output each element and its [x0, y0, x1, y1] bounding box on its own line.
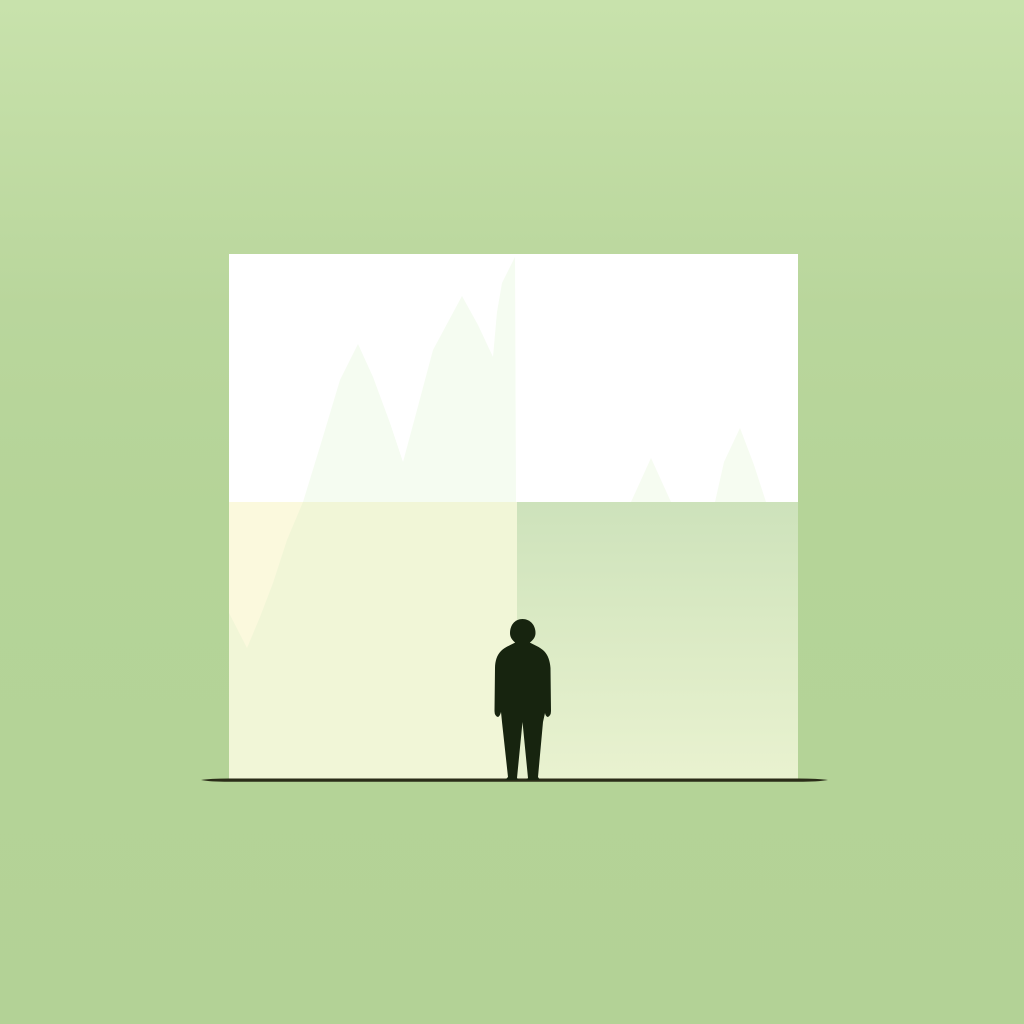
chart: tall peak in top right quadrant — [715, 428, 766, 502]
panel: bottom left pale yellow quadrant — [229, 502, 517, 779]
chart: mountain peaks in top left quadrant — [303, 257, 516, 502]
body — [494, 642, 551, 780]
panel: top right white quadrant — [517, 254, 798, 502]
panel: bottom right green gradient quadrant — [517, 502, 798, 779]
chart: small peak in top right quadrant — [631, 458, 671, 502]
ground line — [201, 778, 828, 782]
head — [510, 619, 536, 643]
chart: lower area fill in bottom left quadrant — [229, 502, 517, 779]
panel: top left white quadrant — [229, 254, 517, 502]
icon: standing person silhouette — [494, 619, 551, 780]
